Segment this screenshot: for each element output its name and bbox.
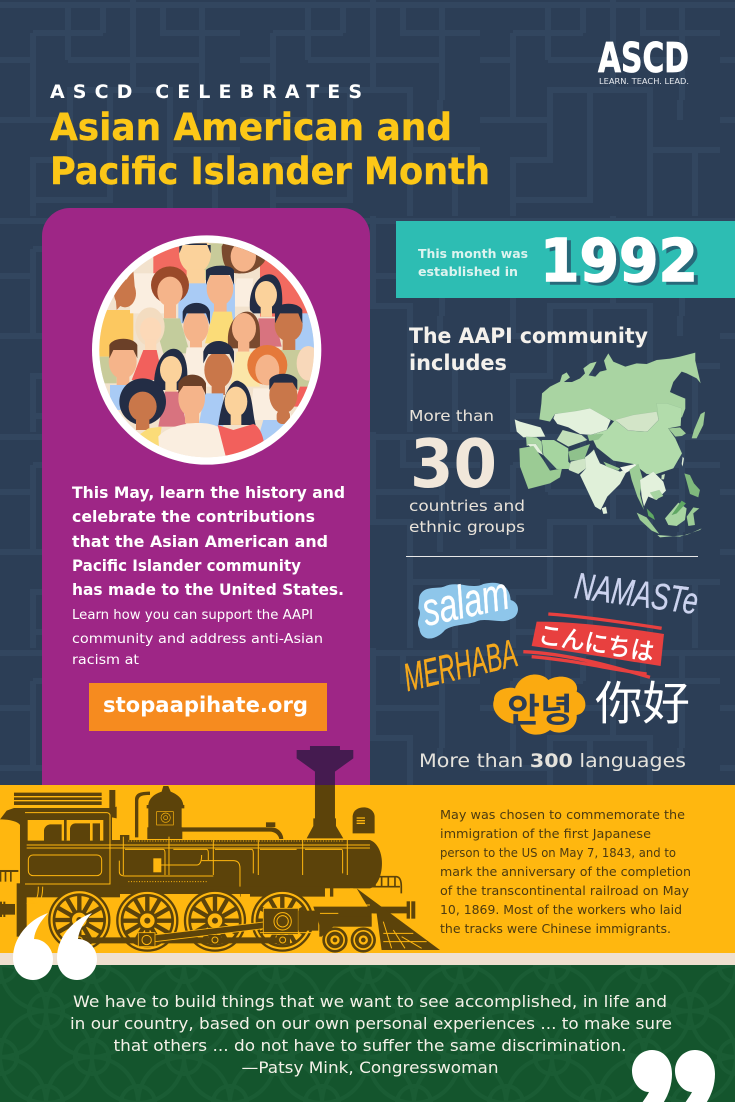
illustration: crowd of people in a circle [90,230,323,465]
banner: established 1992 [396,221,735,298]
text block: why May was chosen: May was chosen to commemorate the [440,808,685,822]
panel: quote background [0,965,735,1102]
quote: Patsy Mink: We have to build things that we want to see accomplished, in life and [73,992,667,1011]
wheels [49,890,376,953]
steam dome [147,786,184,829]
banner: established 1992: established in [418,264,518,279]
body text: call to action [72,608,323,668]
logo: ASCD: ASCD [598,34,689,82]
body text: lead paragraph: has made to the United States. [72,580,344,599]
heading: the AAPI community includes: The AAPI community [409,324,648,349]
text block: why May was chosen: of the transcontinental railroad on May [440,884,689,898]
heading: ASCD celebrates: ASCD CELEBRATES [50,81,362,103]
greeting: Annyeong: 안녕 [507,683,573,732]
banner: established 1992: This month was [418,246,528,261]
frame [110,887,350,894]
text block: why May was chosen: 10, 1869. Most of the workers who laid [440,903,682,917]
body text: lead paragraph: celebrate the contributions [72,507,315,526]
stat: more than 30 countries and ethnic groups [409,407,525,536]
button: website link [89,683,327,731]
body text: call to action: community and address anti-Asian [72,632,323,647]
button: website link: stopaapihate.org [103,693,308,718]
greeting: Konnichiwa: こんにちは [536,615,657,669]
body text: lead paragraph: Pacific Islander community [72,556,302,575]
greeting: Merhaba: MERHABA [399,631,521,700]
band: cream divider [0,953,735,965]
band: yellow history section [0,785,735,953]
greeting: Annyeong [493,675,585,735]
text block: why May was chosen: person to the US on May 7, 1843, and to [440,846,676,860]
panel: purple story panel [42,208,370,785]
body text: lead paragraph [72,483,345,599]
icon: opening quotation mark [13,913,97,980]
quote: Patsy Mink: —Patsy Mink, Congresswoman [242,1058,498,1077]
stat: more than 30 countries and ethnic groups: 30 [410,425,497,503]
quote: Patsy Mink: in our country, based on our own personal experiences ... to make sure [70,1014,672,1033]
title: Pacific Islander Month [50,150,490,193]
chimney top over the purple panel [297,746,353,787]
greeting: Ni hao: 你好 [595,667,690,733]
stat: more than 30 countries and ethnic groups: countries and [409,497,525,515]
icon: closing quotation mark [632,1050,715,1102]
stat: more than 30 countries and ethnic groups: ethnic groups [409,518,525,536]
stat: more than 30 countries and ethnic groups: More than [409,407,494,425]
banner: established 1992: 1992 [540,226,698,295]
text block: why May was chosen [440,808,691,936]
quote: Patsy Mink: that others ... do not have to suffer the same discrimination. [114,1036,626,1055]
body text: call to action: racism at [72,653,139,668]
text block: why May was chosen: the tracks were Chinese immigrants. [440,922,671,936]
heading: the AAPI community includes: includes [409,351,507,376]
quote: Patsy Mink [70,992,672,1077]
stat: more than 300 languages: More than 300 languages [419,750,686,772]
logo: ASCD: LEARN. TEACH. LEAD. [599,77,689,86]
lettering: greetings in many languages [399,564,701,735]
illustration: steam locomotive [0,746,440,953]
title [50,106,490,193]
banner: established 1992: 1992 [544,229,702,298]
yellow detailing [25,813,370,903]
sand dome [353,807,375,833]
text block: why May was chosen: immigration of the first Japanese [440,827,651,841]
body text: lead paragraph: This May, learn the history and [72,483,345,502]
title: Asian American and [50,106,452,149]
body text: call to action: Learn how you can support the AAPI [72,608,313,623]
body text: lead paragraph: that the Asian American and [72,532,328,551]
cowcatcher [357,888,440,950]
heading: the AAPI community includes [409,324,648,376]
rear handrail [372,877,401,893]
rear roof slats [14,793,102,805]
logo: ASCD [598,34,689,86]
text block: why May was chosen: mark the anniversary of the completion [440,865,691,879]
greeting: Salam [417,567,518,639]
map: Asia [515,353,705,537]
connecting rods and cylinder [77,888,440,950]
cab windows [0,820,100,882]
greeting: Salam: salam [417,567,513,636]
